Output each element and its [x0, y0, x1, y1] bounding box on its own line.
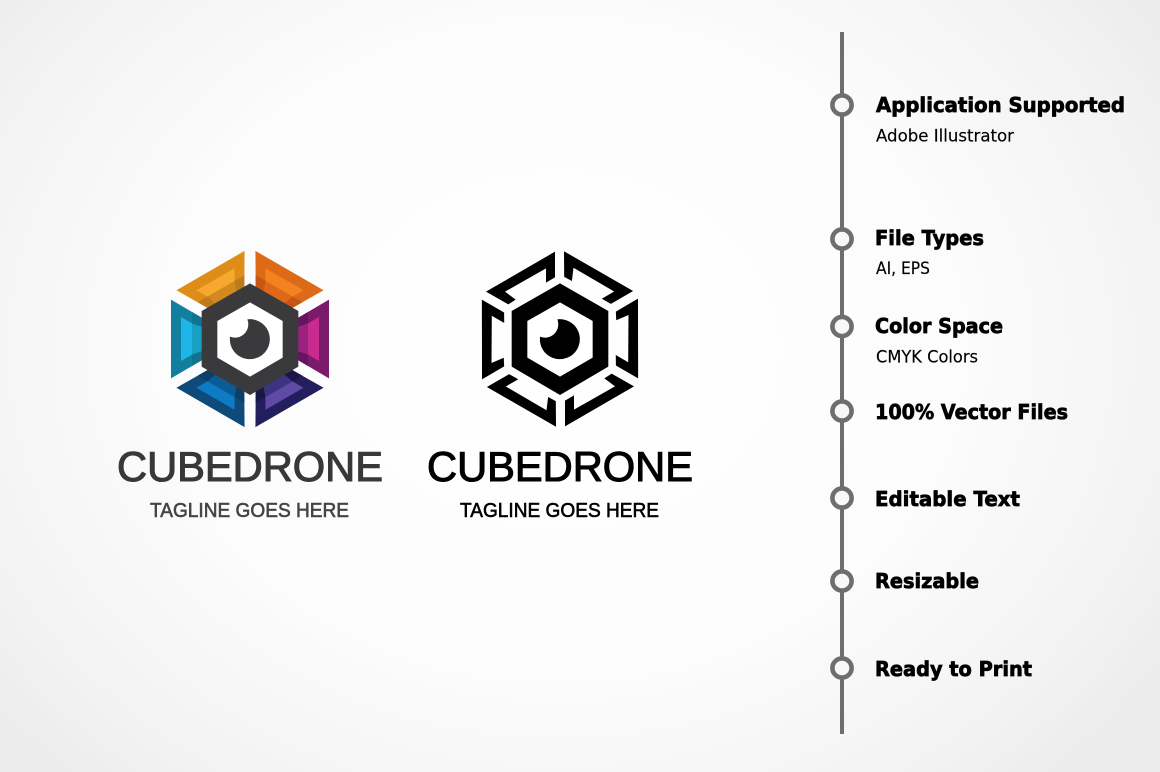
segment: bottom left blue: [176, 360, 261, 427]
feature: ready to print: Ready to Print: [875, 657, 1032, 681]
segment: bottom right violet: [239, 360, 324, 427]
feature: vector files: 100% Vector Files: [875, 400, 1068, 424]
colour logo tagline: TAGLINE GOES HERE: [150, 499, 349, 522]
feature: file types: [875, 226, 984, 278]
feature: application supported: [876, 93, 1125, 146]
feature: color space: [875, 314, 1003, 366]
feature: editable text: Editable Text: [875, 487, 1020, 511]
segment: top left amber: [176, 251, 261, 318]
timeline: [832, 32, 852, 734]
segment: right magenta: [297, 300, 329, 378]
feature: file types: File Types: [875, 226, 984, 250]
feature: application supported: Application Supported: [876, 93, 1125, 117]
feature: resizable: Resizable: [875, 569, 979, 593]
black logo wordmark: CUBEDRONE: [427, 443, 693, 490]
feature: color space: Color Space: [875, 314, 1003, 338]
black logo tagline: TAGLINE GOES HERE: [460, 499, 659, 522]
colour logo wordmark: CUBEDRONE: [117, 443, 383, 490]
central hexagon with eye: [202, 283, 298, 395]
segment: left cyan: [171, 300, 203, 378]
feature: color space: CMYK Colors: [876, 348, 978, 366]
feature: file types: AI, EPS: [876, 259, 930, 278]
colour logo icon: [171, 251, 329, 427]
feature: application supported: Adobe Illustrator: [876, 126, 1014, 146]
black logo icon: [447, 231, 673, 447]
segment: top right orange: [239, 251, 324, 318]
